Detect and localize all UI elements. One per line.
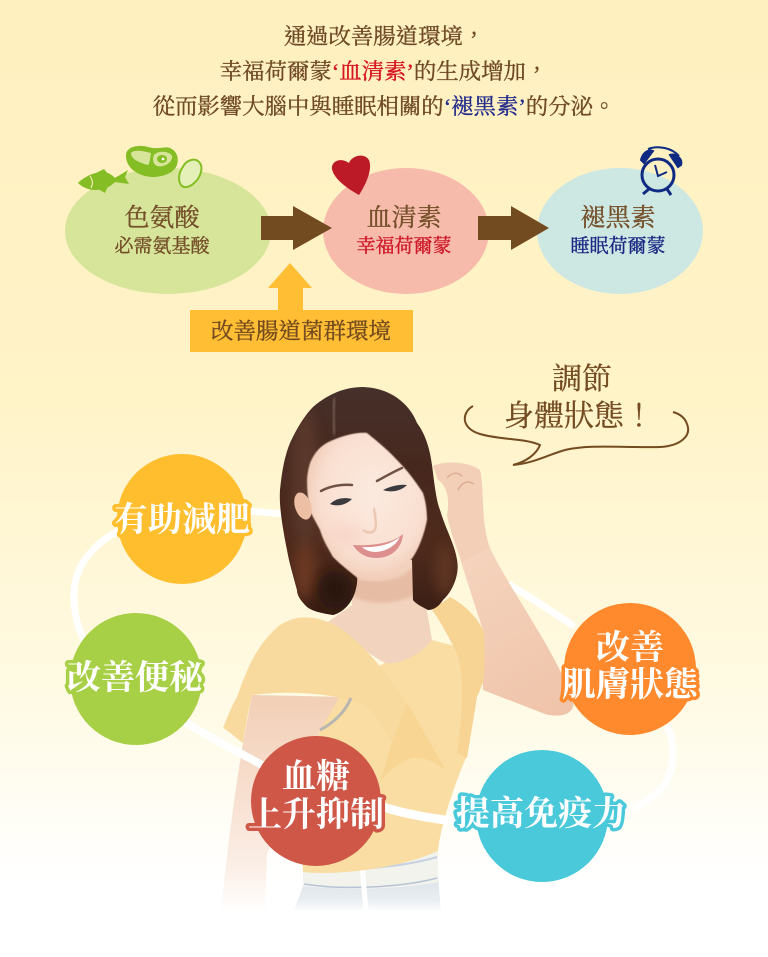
- brows: [321, 468, 402, 491]
- neck shadow: [350, 560, 423, 603]
- box: gut flora: [190, 310, 413, 352]
- near arm fading: [221, 695, 345, 912]
- icon: alarm clock: [641, 147, 681, 195]
- nose: [363, 508, 376, 533]
- speech bubble: 身體狀態！: [504, 400, 654, 433]
- circle: skin: 改善: [596, 629, 664, 667]
- circle: immunity: 提高免疫力: [456, 795, 626, 833]
- raised arm: [460, 548, 573, 716]
- woman photo illustration: [221, 380, 573, 912]
- ruffle lower: [380, 703, 445, 782]
- ellipse: melatonin: 褪黑素: [580, 204, 656, 232]
- circle: skin: [562, 603, 700, 735]
- white connector lines behind figure: [74, 511, 673, 820]
- title: [153, 24, 615, 119]
- circle: skin: 肌膚狀態: [562, 666, 700, 704]
- flow diagram: [65, 146, 703, 352]
- circle: immunity: [456, 750, 626, 882]
- shirt body: [300, 640, 470, 873]
- white connector lines over figure: [185, 722, 480, 824]
- ellipse: tryptophan: [65, 168, 271, 294]
- ellipse: tryptophan: 色氨酸: [124, 204, 200, 232]
- title: 從而影響大腦中與睡眠相關的‘褪黑素’的分泌。: [153, 94, 615, 119]
- circle: constipation: 改善便秘: [67, 659, 206, 697]
- ellipse: melatonin: [537, 168, 703, 294]
- title: 通過改善腸道環境，: [284, 24, 485, 49]
- cheek tint: [327, 523, 363, 547]
- neck and chest: [328, 550, 432, 663]
- circle: blood sugar: [248, 736, 384, 866]
- mouth: [353, 534, 403, 558]
- circle: constipation: [67, 613, 206, 745]
- title: 幸福荷爾蒙‘血清素’的生成增加，: [220, 59, 548, 84]
- skirt: [293, 849, 441, 911]
- ruffle sleeve: [223, 617, 407, 743]
- icon: heart: [332, 156, 370, 195]
- icon: bean: [179, 160, 201, 187]
- hair: [280, 387, 458, 615]
- ruffle right: [432, 597, 485, 758]
- hand: [433, 463, 490, 562]
- ellipse: tryptophan: 必需氨基酸: [114, 235, 210, 257]
- box: gut flora: 改善腸道菌群環境: [211, 319, 391, 344]
- ellipse: serotonin: 幸福荷爾蒙: [356, 235, 452, 257]
- face: [307, 433, 427, 581]
- ellipse: melatonin: 睡眠荷爾蒙: [570, 235, 666, 257]
- ear: [291, 490, 315, 522]
- ellipse: serotonin: 血清素: [366, 204, 442, 232]
- circle: weight loss: 有助減肥: [114, 501, 250, 539]
- circle: weight loss: [114, 454, 250, 584]
- speech bubble: [465, 363, 688, 465]
- circle: blood sugar: 上升抑制: [248, 796, 384, 834]
- arrow: brown 2: [478, 206, 549, 250]
- underarm strap: [320, 698, 351, 730]
- eyes: [330, 485, 407, 505]
- ellipse: serotonin: [323, 168, 489, 294]
- circle: blood sugar: 血糖: [282, 758, 350, 796]
- arrow: yellow: [268, 263, 312, 312]
- arrow: brown 1: [261, 206, 332, 250]
- icon: meat: [126, 146, 178, 177]
- speech bubble: 調節: [552, 363, 612, 396]
- icon: fish: [78, 169, 129, 193]
